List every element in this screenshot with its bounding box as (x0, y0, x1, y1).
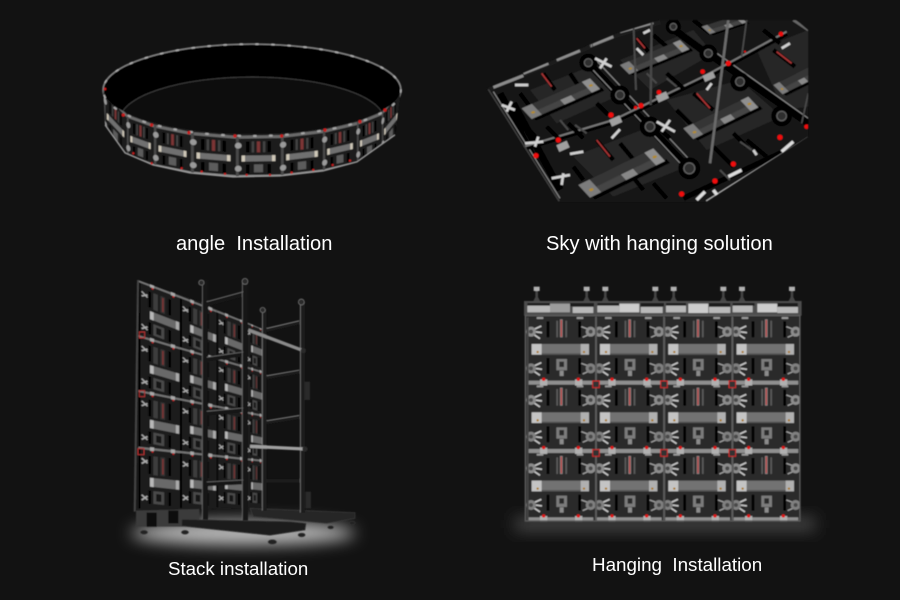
light connector blocks (556, 71, 716, 152)
caption: sky with hanging solution: Sky with hanging solution (546, 233, 773, 255)
dark slots (520, 20, 795, 198)
top hanging beam (524, 301, 802, 316)
clamps (301, 348, 311, 508)
feet (140, 521, 355, 544)
cross beams (500, 27, 808, 190)
panel: sky hanging solution (487, 15, 826, 202)
sky panel structure (487, 15, 826, 202)
white cross clips (502, 30, 790, 185)
outer frame edges (489, 21, 660, 88)
rear frame highlights (262, 302, 300, 513)
ring rim highlights (103, 44, 401, 136)
front base (182, 519, 306, 535)
front post caps (199, 278, 248, 285)
long rails (518, 33, 808, 198)
ring red markers (104, 88, 387, 176)
front frame highlights (202, 280, 243, 521)
wall left edge (135, 280, 138, 512)
rear frame (264, 302, 303, 513)
interior shading (530, 30, 808, 197)
panel: hanging installation (515, 287, 815, 530)
panel: stack installation (131, 277, 355, 545)
caption: angle installation: angle Installation (176, 233, 332, 255)
stack LED wall modules (133, 277, 267, 513)
wall frame outline (525, 316, 800, 521)
column separators (596, 317, 732, 520)
sky panel base (487, 20, 808, 202)
bottom edge bright marks (697, 142, 793, 200)
red strips (542, 38, 792, 157)
red edge clamps (138, 332, 145, 455)
grey slot details (560, 73, 752, 180)
ring bottom edge (105, 125, 395, 177)
stack rear frame base (250, 508, 355, 523)
diagonal side bars (248, 330, 304, 351)
panel: angle installation ring (100, 44, 405, 180)
front frame (205, 280, 245, 521)
LED wall modules (525, 316, 801, 522)
red markers (533, 32, 809, 197)
hanging hooks (533, 287, 795, 301)
hanging rods (587, 20, 808, 163)
ring inner floor ellipse (120, 77, 384, 163)
caption: stack installation: Stack installation (168, 558, 308, 579)
bottom wall glow (515, 518, 815, 530)
floor glow (131, 521, 355, 545)
knob light rings (584, 23, 786, 174)
rear post caps (260, 299, 304, 313)
red junction squares (593, 381, 736, 456)
ring inner wall (103, 44, 401, 136)
caption: hanging installation: Hanging Installation (592, 554, 762, 575)
light beam edges (493, 51, 808, 198)
stack lower wall boxes (136, 508, 199, 527)
round hinge knobs (582, 21, 790, 177)
ring front band modules (102, 90, 401, 177)
long grey bars (522, 77, 604, 122)
